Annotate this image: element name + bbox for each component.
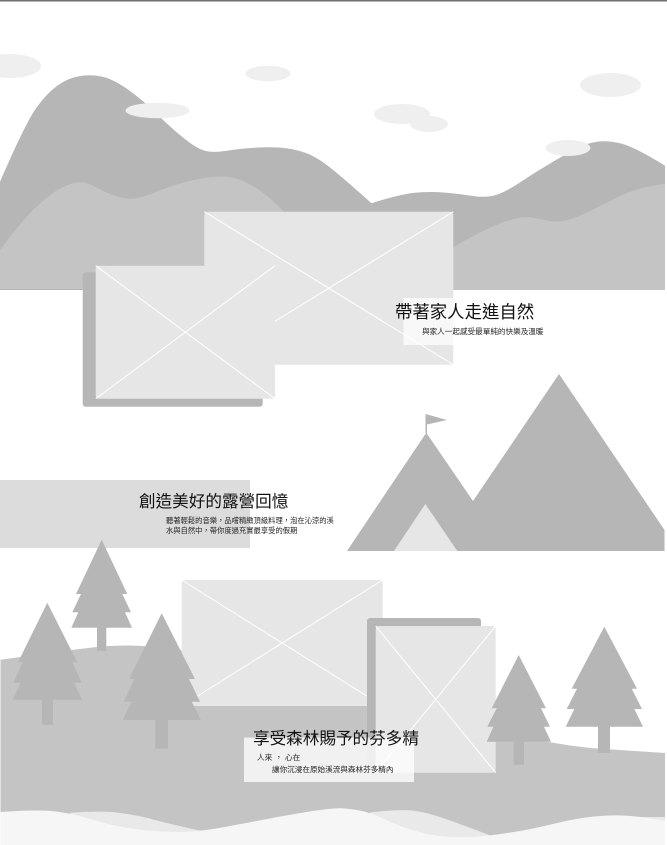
description: 聽著輕鬆的音樂，品嚐精緻頂級料理，泡在沁涼的溪 bbox=[166, 516, 334, 525]
flag bbox=[426, 414, 447, 433]
tent doorway bbox=[394, 504, 457, 551]
ground bbox=[0, 646, 665, 845]
heading: 創造美好的露營回憶 bbox=[139, 492, 288, 511]
image shadow: forest right bbox=[367, 618, 481, 765]
image placeholder: top left bbox=[96, 266, 275, 399]
text block: family in nature bbox=[395, 298, 544, 345]
heading: 享受森林賜予的芬多精 bbox=[253, 729, 419, 748]
description line 1: ， bbox=[275, 753, 283, 762]
top border bar bbox=[0, 0, 667, 2]
image placeholder: forest large bbox=[182, 580, 383, 706]
description line 1: 人來 bbox=[257, 753, 273, 762]
description line 2: 讓你沉浸在原始溪流與森林芬多精內 bbox=[272, 764, 394, 774]
tree 4 bbox=[487, 655, 551, 765]
panel: mountains with flag bbox=[347, 374, 664, 551]
back mountain range bbox=[0, 75, 665, 290]
front waves bbox=[0, 808, 665, 845]
light back waves bbox=[70, 810, 665, 845]
image placeholder: large top bbox=[204, 212, 453, 365]
text block: forest phytoncide bbox=[244, 729, 419, 782]
image shadow: top left bbox=[83, 272, 263, 407]
text block: camping memories bbox=[0, 480, 334, 548]
description: 與家人一起感受最單純的快樂及溫暖 bbox=[422, 326, 544, 336]
tree 2 bbox=[71, 540, 132, 651]
tree 5 bbox=[566, 627, 643, 753]
front hill right bbox=[404, 184, 665, 290]
panel: hills scene bbox=[0, 54, 665, 290]
description line 1: 心在 bbox=[285, 752, 301, 762]
image placeholder: forest right bbox=[376, 626, 496, 773]
twin peaks bbox=[347, 374, 664, 551]
front hill left bbox=[0, 177, 330, 289]
text block: camping memories: 水與自然中，帶你度過充實最享受的假期 bbox=[166, 526, 297, 535]
clouds bbox=[0, 54, 641, 156]
heading: 帶著家人走進自然 bbox=[395, 302, 534, 322]
tree 3 bbox=[123, 613, 201, 749]
caption backing bbox=[0, 480, 250, 548]
caption backing bbox=[244, 738, 414, 782]
tree 1 bbox=[13, 603, 82, 725]
caption backing bbox=[404, 298, 454, 345]
